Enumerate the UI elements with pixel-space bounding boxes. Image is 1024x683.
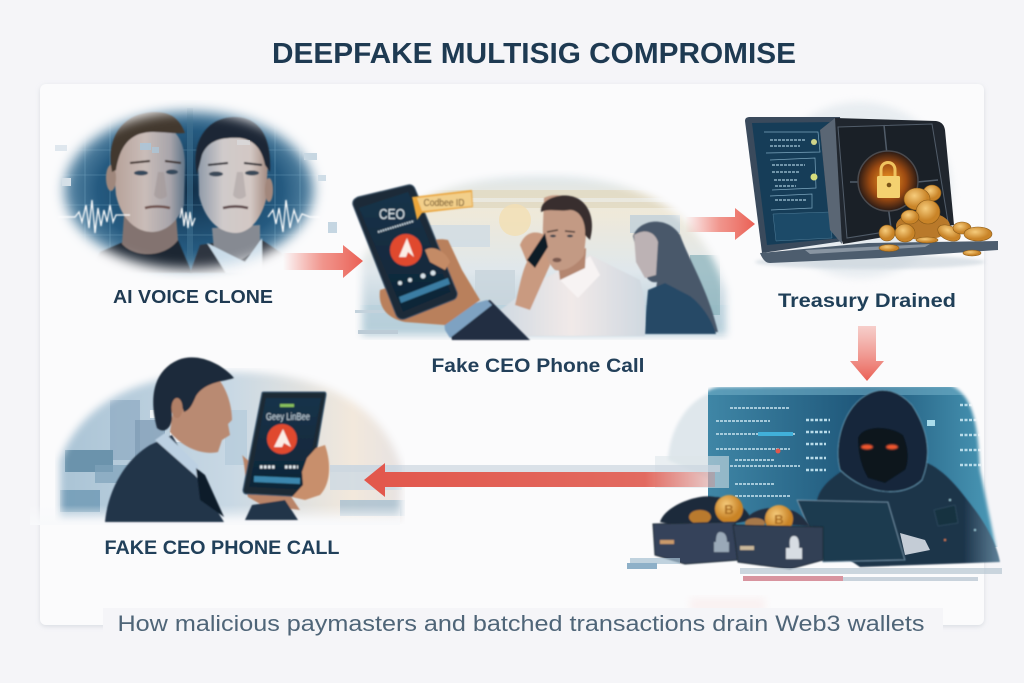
hand behind tablet — [242, 455, 300, 510]
subtitle: How malicious paymasters and batched transactions drain Web3 wallets — [118, 611, 925, 636]
waveforms — [58, 200, 320, 233]
scene: fake CEO phone call — [353, 170, 735, 340]
scene: treasury drained — [745, 102, 998, 278]
arrow: attacker to target — [364, 463, 715, 497]
arrow: treasury down to attacker — [850, 326, 884, 381]
pale band above attacker arrow — [330, 465, 720, 472]
woman — [633, 222, 718, 334]
label: fake CEO phone call: Fake CEO Phone Call — [432, 355, 644, 377]
man — [497, 195, 645, 336]
right face — [191, 116, 280, 274]
treasure box left: B — [724, 502, 734, 517]
label: AI voice clone: AI VOICE CLONE — [113, 287, 273, 307]
footer backing — [103, 608, 943, 642]
scene: target checks tablet — [30, 357, 405, 525]
coinbase ID tag: Codbee ID — [424, 198, 464, 209]
arrow: voice clone to phone call — [283, 245, 363, 278]
hand and phone: CEO — [379, 206, 405, 223]
scene: hooded attacker — [627, 387, 1002, 581]
safe — [820, 118, 954, 244]
faint glitch smudge — [690, 598, 765, 612]
coinbase ID tag — [412, 190, 473, 220]
fingers — [292, 445, 329, 500]
treasure box left — [653, 495, 752, 564]
scene: target checks tablet: Geey LinBee — [266, 412, 310, 423]
man in suit — [105, 435, 224, 522]
tablet — [243, 392, 326, 497]
main panel — [40, 84, 984, 625]
hand and phone — [353, 185, 530, 340]
scene: AI voice clone faces — [50, 100, 337, 280]
pale glitch block over screen corner — [655, 456, 729, 488]
hooded figure — [817, 462, 1000, 567]
coin pile — [879, 185, 992, 256]
title: DEEPFAKE MULTISIG COMPROMISE — [272, 38, 796, 70]
glitch strips — [630, 558, 680, 564]
laptop — [745, 117, 850, 253]
treasure box right: B — [774, 512, 784, 527]
left face — [100, 112, 191, 274]
label: treasury drained: Treasury Drained — [778, 290, 956, 312]
attacker laptop — [797, 500, 905, 562]
label: fake CEO phone call uppercase: FAKE CEO PHONE CALL — [104, 537, 340, 559]
treasure box right — [733, 505, 823, 569]
arrow: phone call to treasury — [685, 208, 755, 240]
